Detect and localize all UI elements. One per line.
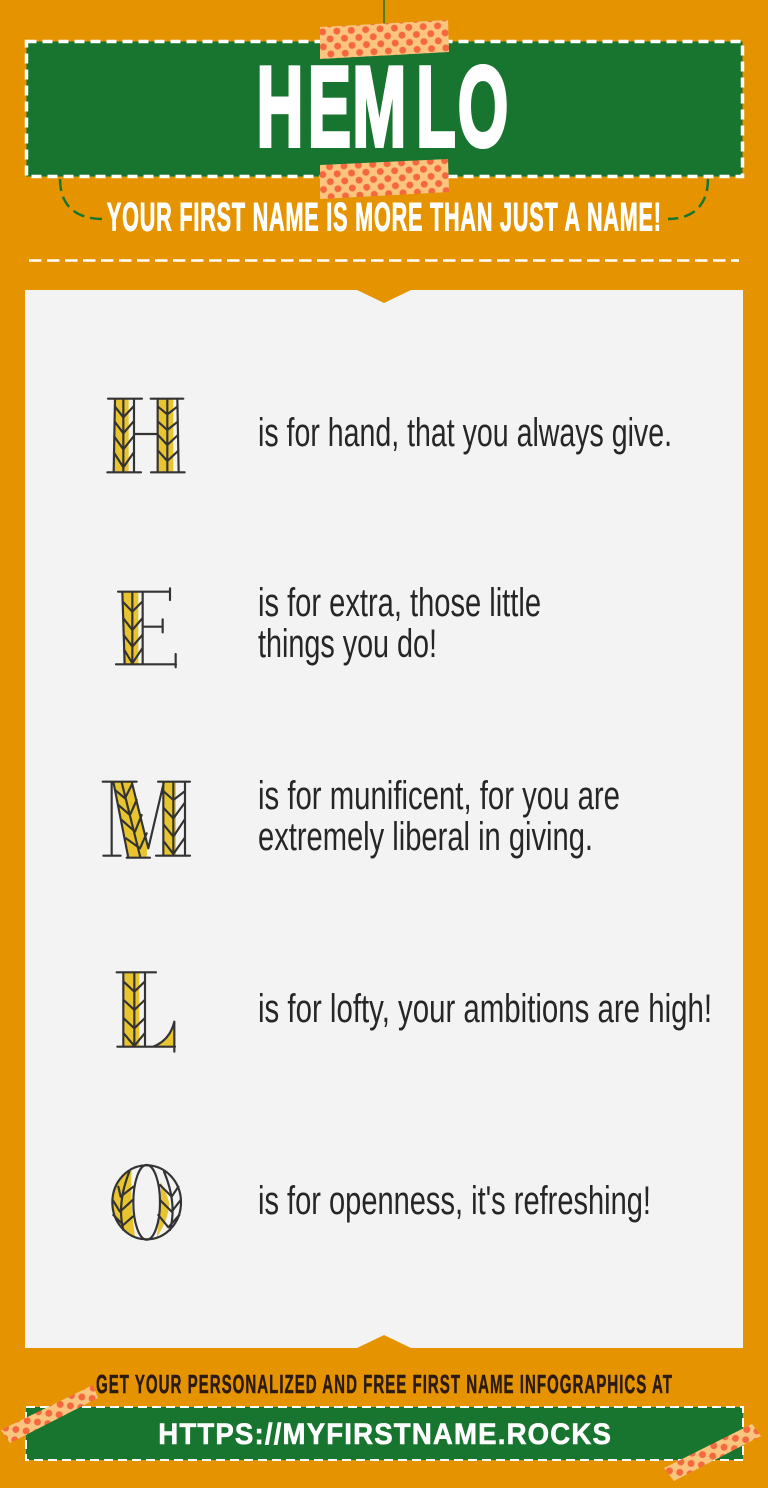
letter E icon — [116, 588, 176, 667]
letter M icon — [103, 782, 190, 858]
tape: footer right — [664, 1424, 761, 1481]
tape: bottom — [320, 159, 449, 199]
dashed divider — [29, 259, 739, 262]
panel: letters — [25, 290, 743, 1348]
left connector — [60, 179, 103, 219]
row text: E: is for extra, those little — [258, 581, 541, 625]
row text: M: extremely liberal in giving. — [258, 815, 593, 859]
letter O icon — [112, 1165, 181, 1240]
hanging string — [383, 0, 385, 26]
right connector — [668, 179, 708, 219]
tape: top — [320, 20, 449, 59]
row text: E: things you do! — [258, 622, 437, 666]
row text: M: is for munificent, for you are — [258, 774, 620, 818]
tape: footer left — [1, 1385, 98, 1443]
row text: E — [258, 581, 541, 666]
title: HEMLO — [256, 43, 508, 171]
footer call to action: GET YOUR PERSONALIZED AND FREE FIRST NAME INFOGRAPHICS AT — [96, 1370, 672, 1399]
footer url: HTTPS://MYFIRSTNAME.ROCKS — [158, 1418, 611, 1451]
letter L icon — [117, 972, 175, 1052]
row text: M — [258, 774, 620, 859]
header banner — [26, 42, 742, 176]
subtitle: YOUR FIRST NAME IS MORE THAN JUST A NAME! — [107, 194, 661, 239]
letter H icon — [107, 399, 185, 472]
footer banner — [26, 1407, 743, 1460]
